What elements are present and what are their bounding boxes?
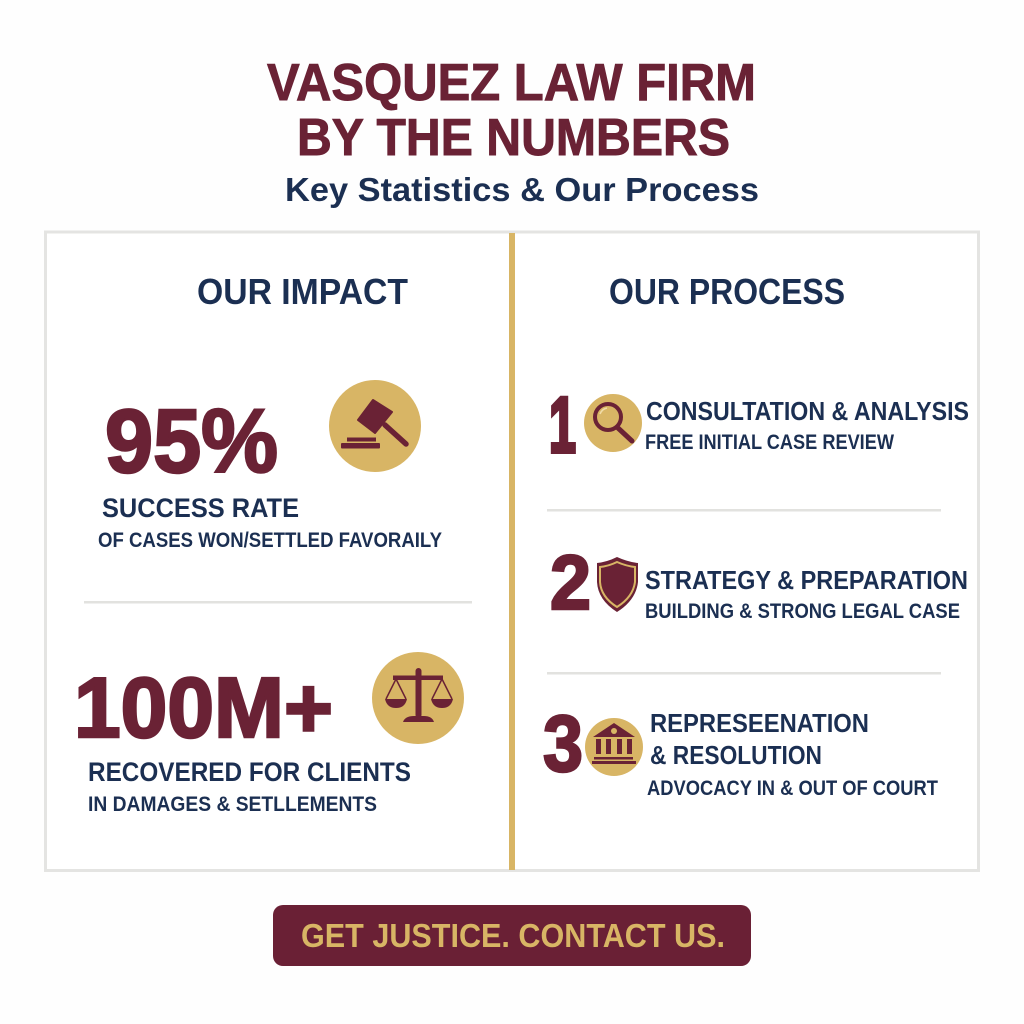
subtitle: Key Statistics & Our Process bbox=[285, 171, 759, 208]
step 3 description: ADVOCACY IN & OUT OF COURT bbox=[647, 777, 938, 800]
panel: main frame bbox=[46, 232, 978, 870]
step 3 title: & RESOLUTION bbox=[650, 740, 822, 770]
panel: our process bbox=[543, 271, 969, 800]
step 1 bbox=[549, 380, 969, 469]
step number 1: 1 bbox=[549, 380, 576, 469]
step 3 title: REPRESEENATION bbox=[650, 708, 869, 738]
call to action button: GET JUSTICE. CONTACT US. bbox=[301, 917, 725, 954]
step 2 title: STRATEGY & PREPARATION bbox=[645, 565, 968, 595]
step 1 title: CONSULTATION & ANALYSIS bbox=[646, 396, 969, 426]
label: success rate: SUCCESS RATE bbox=[102, 493, 299, 523]
step number 3: 3 bbox=[543, 699, 583, 788]
icon: scales of justice bbox=[372, 652, 464, 744]
step number 2: 2 bbox=[550, 540, 591, 626]
icon: gavel bbox=[329, 380, 421, 472]
description: recovered: IN DAMAGES & SETLLEMENTS bbox=[88, 793, 377, 816]
step 3 bbox=[543, 699, 938, 800]
panel: our impact bbox=[74, 271, 464, 816]
step 2 bbox=[550, 540, 968, 626]
call to action button bbox=[273, 905, 751, 966]
gold column divider bbox=[509, 233, 515, 870]
icon: magnifying glass bbox=[584, 394, 642, 452]
heading: our process: OUR PROCESS bbox=[609, 271, 845, 312]
label: recovered for clients: RECOVERED FOR CLIENTS bbox=[88, 757, 411, 787]
icon: shield bbox=[597, 557, 638, 612]
icon: courthouse bbox=[585, 718, 643, 776]
step 2 description: BUILDING & STRONG LEGAL CASE bbox=[645, 600, 960, 623]
step 3 title bbox=[650, 708, 869, 770]
step 1 description: FREE INITIAL CASE REVIEW bbox=[645, 431, 894, 454]
description: success rate: OF CASES WON/SETTLED FAVORAILY bbox=[98, 528, 442, 552]
heading: our impact: OUR IMPACT bbox=[197, 271, 408, 312]
title: BY THE NUMBERS bbox=[297, 108, 730, 166]
title: VASQUEZ LAW FIRM bbox=[267, 53, 756, 111]
stat: 100M+: 100M+ bbox=[74, 661, 333, 756]
stat: 95%: 95% bbox=[105, 392, 278, 492]
title bbox=[267, 53, 756, 166]
